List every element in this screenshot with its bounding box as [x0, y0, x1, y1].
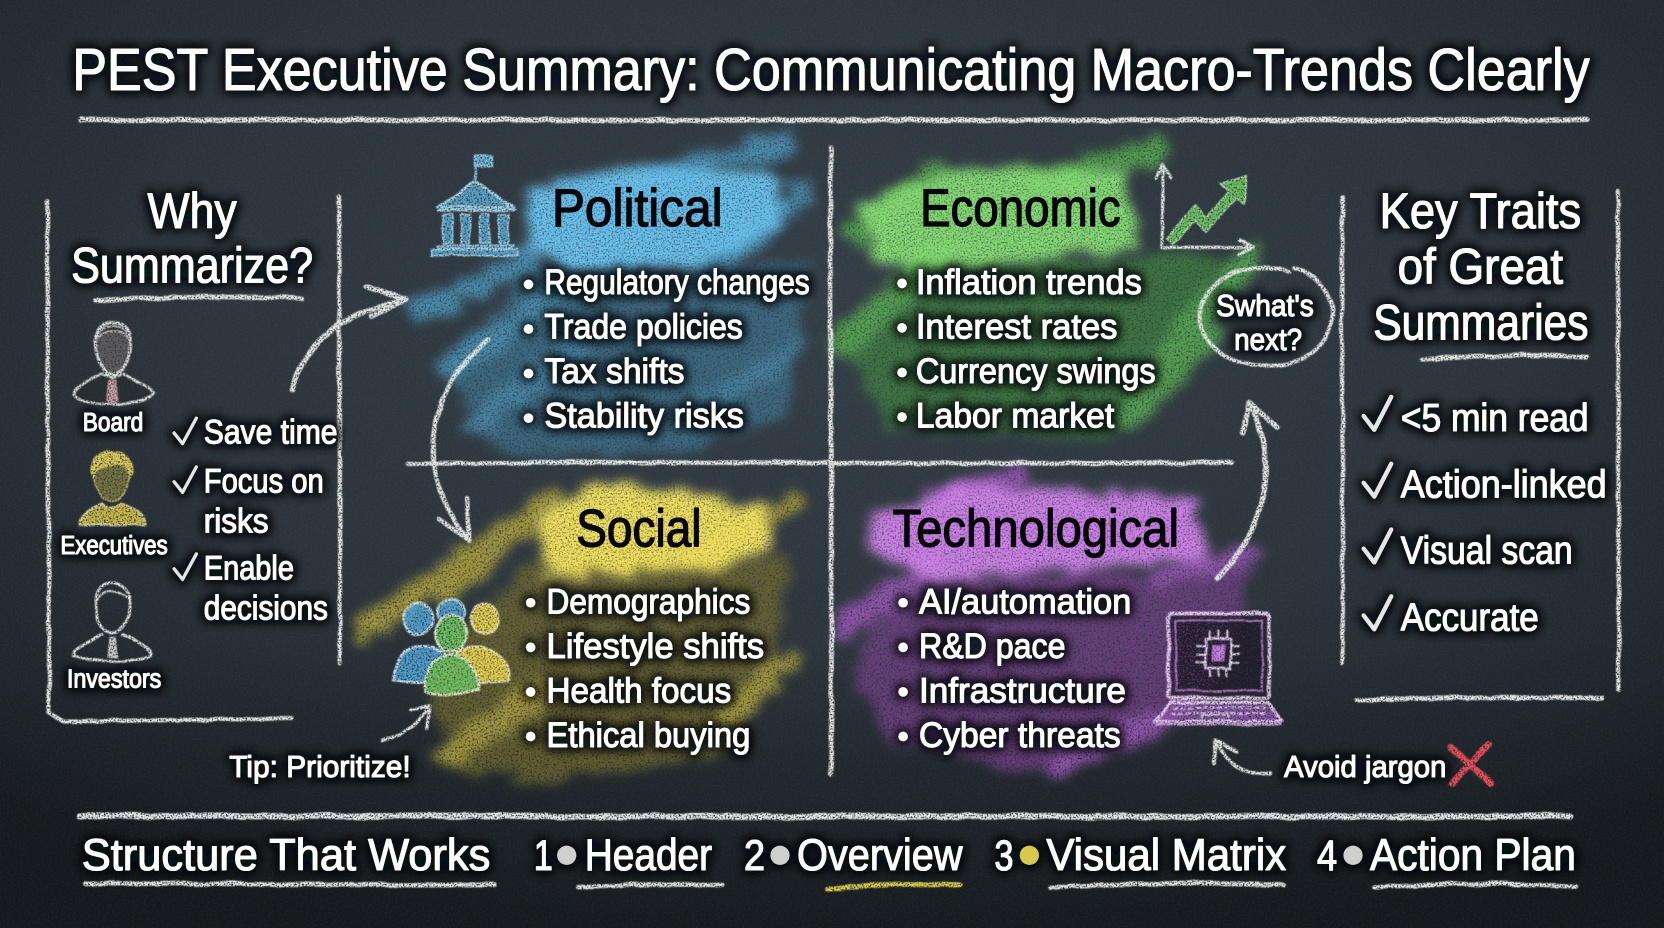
arrow: technological to what's next — [1217, 402, 1277, 578]
step 1: 1 — [534, 832, 553, 879]
list: social: Demographics — [547, 582, 750, 621]
list: economic — [897, 263, 1156, 436]
text: swhat's next — [1216, 288, 1314, 357]
arrow: avoid jargon — [1214, 741, 1270, 774]
step 4: 4 — [1317, 832, 1337, 879]
checklist: benefits: decisions — [204, 590, 328, 628]
arrow: tip — [382, 706, 430, 741]
list: political: Stability risks — [544, 397, 744, 436]
bottom divider lines — [80, 815, 1576, 887]
list: social: Ethical buying — [547, 716, 750, 755]
checklist: benefits: risks — [204, 503, 269, 541]
step 3: 3 — [994, 832, 1013, 879]
list: economic: Currency swings — [916, 352, 1156, 391]
callout: what's next — [1200, 267, 1333, 366]
heading: political: Political — [552, 179, 723, 238]
list: political: Tax shifts — [544, 352, 684, 391]
label: investors: Investors — [67, 666, 161, 694]
icon: laptop with chip — [1155, 613, 1282, 726]
text: tip: Tip: Prioritize! — [229, 749, 411, 784]
chalk circle — [1200, 267, 1333, 366]
panel: why summarize — [47, 183, 340, 722]
list: economic: Labor market — [916, 397, 1115, 436]
step 2: Overview — [797, 831, 963, 880]
arrow: to political — [292, 287, 405, 391]
text: swhat's next: next? — [1234, 322, 1302, 357]
list: political — [524, 263, 810, 436]
chalk smear: purple — [847, 478, 1252, 773]
text: avoid jargon: Avoid jargon — [1284, 749, 1446, 784]
list: technological: R&D pace — [919, 627, 1065, 666]
heading: technological: Technological — [892, 500, 1179, 559]
list: technological: Cyber threats — [919, 716, 1121, 755]
label: executives: Executives — [61, 532, 168, 560]
step 1: Header — [585, 831, 712, 880]
panel: technological — [847, 478, 1282, 773]
callout: avoid jargon — [1214, 741, 1491, 784]
list: technological: Infrastructure — [919, 671, 1126, 710]
chalk smear: yellow — [366, 480, 791, 783]
list: political: Regulatory changes — [544, 263, 810, 302]
text: swhat's next: Swhat's — [1216, 288, 1314, 323]
list: technological: AI/automation — [919, 582, 1131, 621]
checklist: traits: Accurate — [1401, 595, 1539, 639]
chalk smear: green — [847, 151, 1252, 440]
panel frame: why summarize — [47, 196, 340, 722]
step 4: Action Plan — [1370, 831, 1576, 880]
list: economic: Interest rates — [916, 308, 1117, 347]
chalk smear: blue — [422, 144, 807, 456]
list: social — [526, 582, 764, 755]
step 1 — [534, 831, 712, 880]
step 3: Visual Matrix — [1046, 831, 1286, 880]
icon: executive — [80, 451, 145, 525]
icon: people group — [394, 600, 509, 695]
icon: red cross — [1451, 744, 1491, 784]
checklist: benefits: Focus on — [204, 462, 324, 500]
label: structure that works: Structure That Works — [82, 831, 490, 880]
heading: why summarize: Summarize? — [71, 237, 313, 293]
heading: why summarize — [71, 183, 313, 293]
section: structure that works — [80, 815, 1576, 889]
underline: overview — [828, 884, 960, 889]
checklist: benefits — [174, 414, 337, 628]
panel: social — [366, 480, 791, 783]
checklist: traits: Visual scan — [1401, 528, 1573, 572]
checklist: benefits: Enable — [204, 549, 294, 587]
heading: social: Social — [576, 500, 701, 559]
icon: board member — [73, 322, 153, 405]
panel: key traits — [1342, 183, 1619, 700]
list: technological — [898, 582, 1131, 755]
heading: why summarize: Why — [148, 183, 237, 239]
step 2: 2 — [744, 832, 765, 879]
icon: investor — [74, 582, 152, 661]
checklist: traits — [1364, 396, 1607, 639]
icon: growth chart — [1156, 164, 1253, 255]
arrow: political to social — [433, 340, 488, 541]
label: board: Board — [83, 409, 143, 437]
icon: government building — [432, 154, 518, 256]
checklist: benefits: Save time — [204, 414, 337, 452]
heading: key traits: Key Traits — [1380, 183, 1581, 239]
list: political: Trade policies — [544, 308, 743, 347]
title underline — [80, 119, 1586, 120]
checklist: traits: Action-linked — [1401, 463, 1607, 507]
panel: political — [422, 144, 810, 456]
list: economic: Inflation trends — [916, 263, 1142, 302]
step 2 — [744, 831, 963, 880]
heading: key traits: of Great — [1398, 238, 1563, 294]
callout: tip prioritize — [229, 706, 430, 784]
heading: key traits: Summaries — [1373, 295, 1589, 351]
matrix cross dividers — [409, 149, 1231, 775]
panel: economic — [847, 151, 1253, 440]
heading: key traits — [1373, 183, 1589, 351]
list: social: Lifestyle shifts — [547, 627, 764, 666]
panel frame: key traits — [1342, 191, 1619, 700]
checklist: traits: <5 min read — [1401, 396, 1589, 440]
heading: economic: Economic — [920, 179, 1121, 238]
list: social: Health focus — [547, 671, 731, 710]
